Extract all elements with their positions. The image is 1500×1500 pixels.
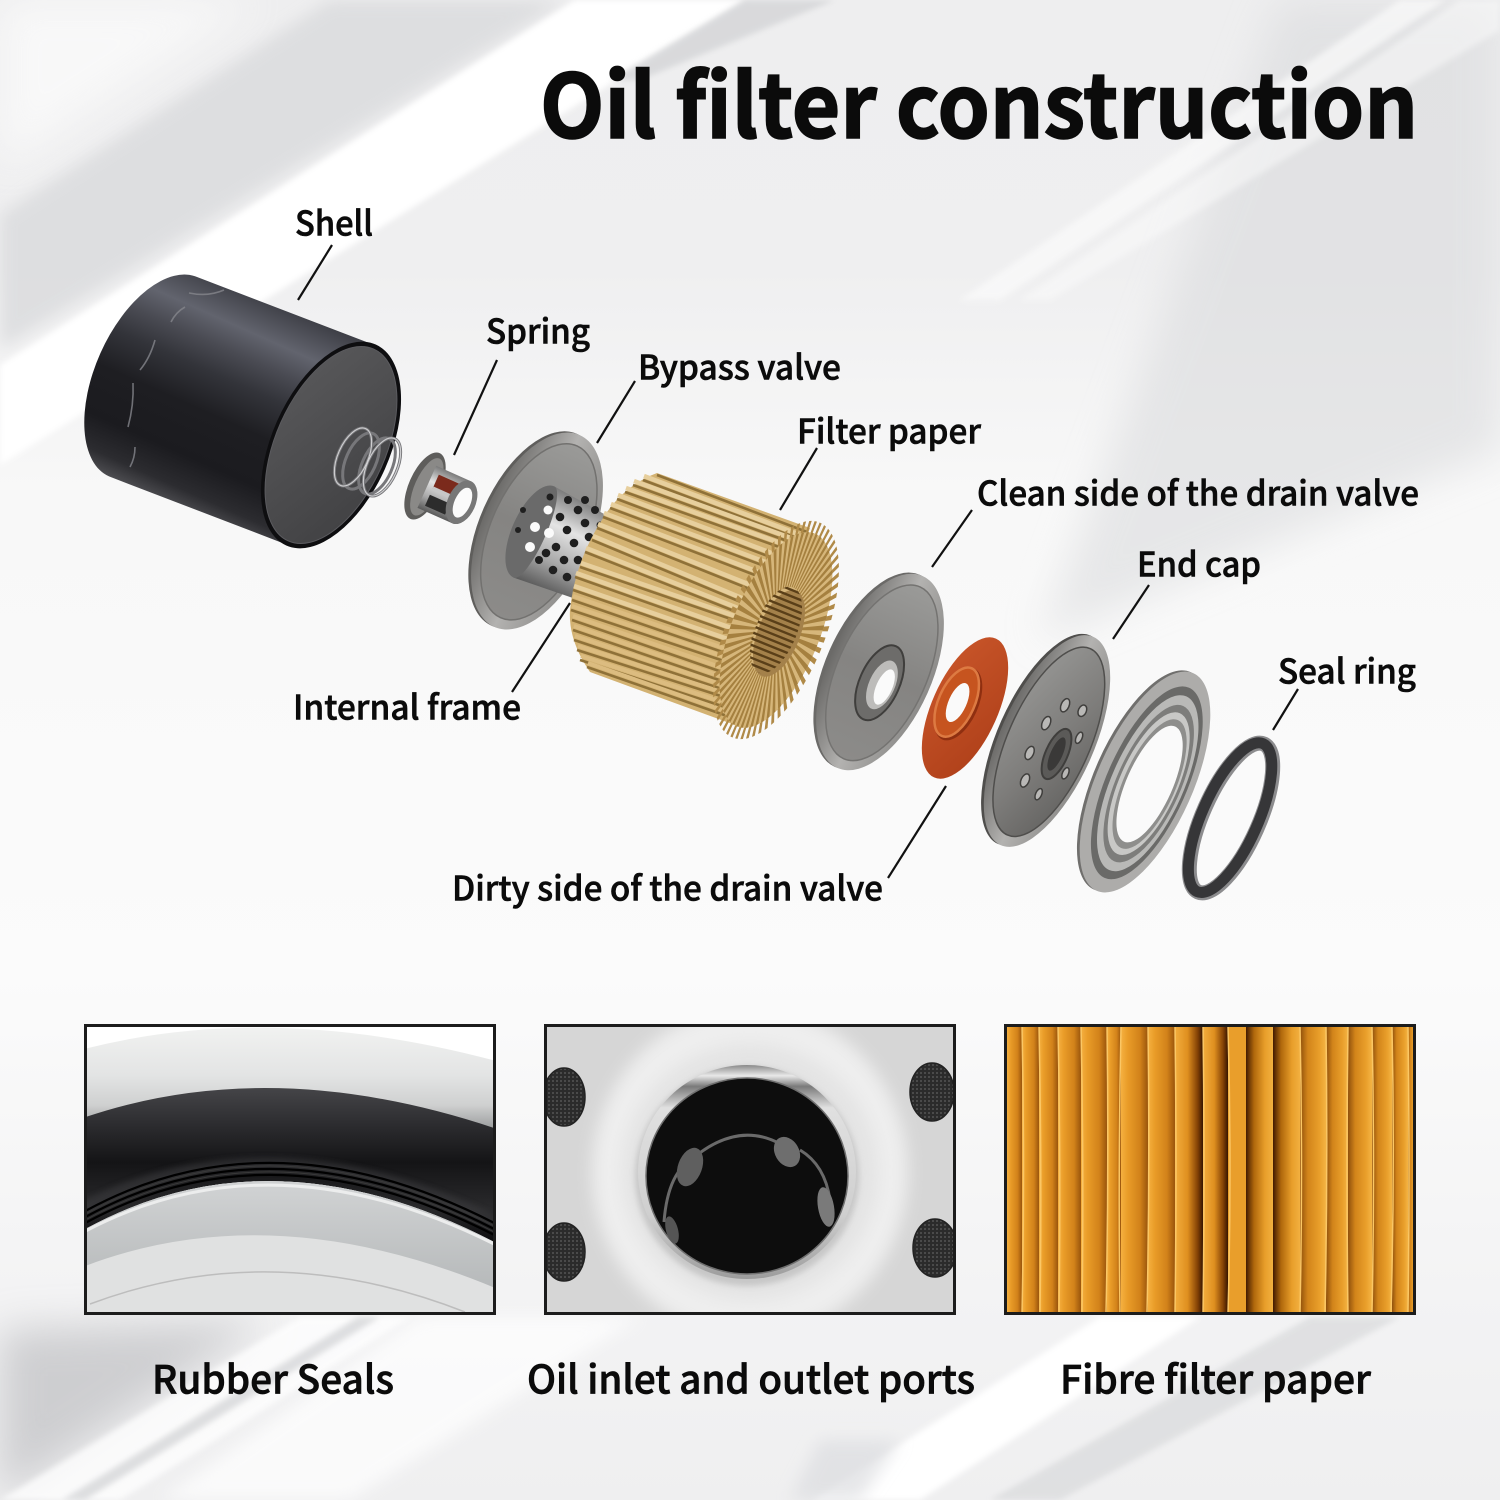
label: Shell xyxy=(295,196,373,300)
label: Bypass valve: Bypass valve xyxy=(638,340,841,390)
part: red dirty side of the drain valve xyxy=(904,625,1026,791)
label: Spring: Spring xyxy=(486,304,590,354)
panel: rubber seals close-up xyxy=(80,1026,500,1320)
label: Internal frame xyxy=(293,603,570,730)
part: spring xyxy=(327,423,408,501)
part: perforated internal frame xyxy=(494,477,637,614)
part: black shell xyxy=(56,244,430,578)
part: retainer ring xyxy=(1050,653,1237,910)
label: Shell: Shell xyxy=(295,196,373,246)
label: Clean side of the drain valve: Clean side of the drain valve xyxy=(977,466,1419,516)
label: Seal ring xyxy=(1273,644,1416,730)
label: Dirty side of the drain valve: Dirty side of the drain valve xyxy=(452,862,883,910)
label: Clean side of the drain valve xyxy=(932,466,1419,567)
panel: fibre filter paper close-up xyxy=(1006,1026,1415,1314)
part: small valve body xyxy=(396,447,489,541)
label: Internal frame: Internal frame xyxy=(293,680,521,730)
label: Filter paper xyxy=(780,404,981,510)
panel: oil inlet and outlet ports close-up xyxy=(544,1024,956,1315)
part: seal ring xyxy=(1172,732,1290,903)
label: Seal ring: Seal ring xyxy=(1278,644,1416,694)
caption: Rubber Seals: Rubber Seals xyxy=(152,1350,394,1406)
label: End cap xyxy=(1113,538,1261,639)
label: Spring xyxy=(454,304,590,455)
caption: Fibre filter paper: Fibre filter paper xyxy=(1060,1350,1372,1406)
label: Filter paper: Filter paper xyxy=(797,404,981,454)
mesh port holes xyxy=(543,1063,957,1281)
shell crimp highlights xyxy=(128,290,224,467)
caption: Oil inlet and outlet ports: Oil inlet and outlet ports xyxy=(527,1350,975,1406)
exploded diagram of the oil filter xyxy=(56,244,1290,910)
part: end cap xyxy=(955,617,1136,864)
central outlet port xyxy=(638,1065,856,1279)
part: pleated filter paper xyxy=(570,473,839,740)
title: Oil filter construction xyxy=(540,37,1418,164)
part: clean side of the drain valve xyxy=(787,554,970,789)
part: bypass valve plate xyxy=(441,411,630,649)
label: End cap: End cap xyxy=(1137,538,1261,586)
label: Bypass valve xyxy=(597,340,841,443)
label: Dirty side of the drain valve xyxy=(452,786,946,910)
